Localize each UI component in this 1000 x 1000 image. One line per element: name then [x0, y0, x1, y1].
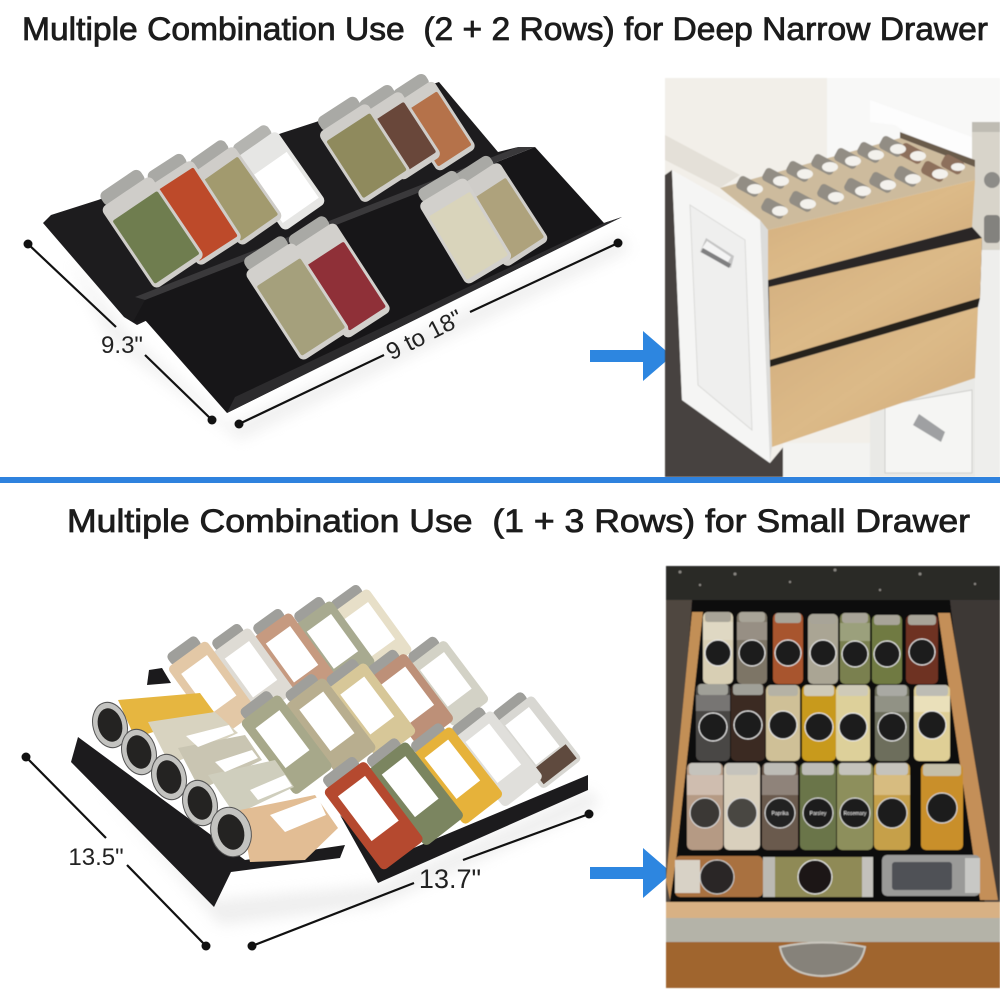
- dimension: 13.7 inch: 13.7": [419, 864, 481, 894]
- door front: [672, 170, 770, 463]
- drawer interior: [670, 600, 985, 905]
- dimension: 9.3 inch: [24, 240, 216, 424]
- front tray: [133, 147, 622, 413]
- back row jars: [161, 579, 413, 739]
- drawer top with jars: [720, 138, 975, 230]
- horizontal jars on left tray: [88, 693, 338, 862]
- left tray: [71, 737, 345, 907]
- jars: back right group: [311, 69, 477, 204]
- title: small drawer: Multiple Combination Use (1 + 3 Rows) for Small Drawer: [67, 503, 970, 539]
- drawer front: [666, 902, 1000, 988]
- jars row 2: [696, 684, 950, 761]
- back tray: [43, 82, 518, 325]
- arrow: bottom blue: [590, 848, 672, 898]
- wooden drawer panels: [768, 227, 982, 367]
- jars: back left group: [93, 120, 327, 290]
- back tray stub: [147, 668, 171, 685]
- icon: door handle: [700, 238, 734, 268]
- lower handle: [913, 414, 945, 442]
- photo: deep narrow drawer in cabinet: [665, 78, 1000, 477]
- appliance: [972, 122, 1000, 252]
- middle row jars: [234, 631, 490, 796]
- dimension: 13.5 inch: [22, 752, 210, 950]
- title: deep narrow drawer: Multiple Combination Use (2 + 2 Rows) for Deep Narrow Drawer: [22, 11, 988, 47]
- jars row 4: horizontal: [675, 855, 980, 897]
- jars row 3: Parsley: [810, 811, 827, 817]
- jars: front left group: [238, 211, 392, 362]
- jar lids: [88, 698, 257, 861]
- front row jars: [316, 687, 582, 871]
- floor: [665, 170, 785, 477]
- dimension: 9 to 18 inch: 9 to 18": [382, 305, 467, 366]
- product photo: 1 + 3 rows tray with jars: [71, 579, 600, 925]
- right tray: [340, 775, 588, 883]
- product photo: 2 + 2 rows tray with jars: [43, 69, 630, 440]
- jars: front right group: [412, 151, 550, 286]
- dimension: 13.5 inch: 13.5": [68, 844, 124, 871]
- dimension: 9.3 inch: 9.3": [101, 332, 143, 359]
- dimension: 13.7 inch: [248, 810, 594, 950]
- divider: [0, 477, 1000, 483]
- lower cabinet: [975, 250, 1000, 477]
- jars row 3: [687, 763, 963, 850]
- dimension: 9 to 18 inch: [234, 238, 622, 428]
- granite counter: [666, 566, 1000, 600]
- jars row 1: [703, 612, 938, 684]
- icon: bowl handle: [780, 942, 865, 976]
- jars row 3: Paprika: [772, 811, 789, 817]
- arrow: top blue: [590, 331, 672, 381]
- photo: spice jars in small drawer: [666, 566, 1000, 988]
- jars row 3: Rosemary: [844, 811, 867, 817]
